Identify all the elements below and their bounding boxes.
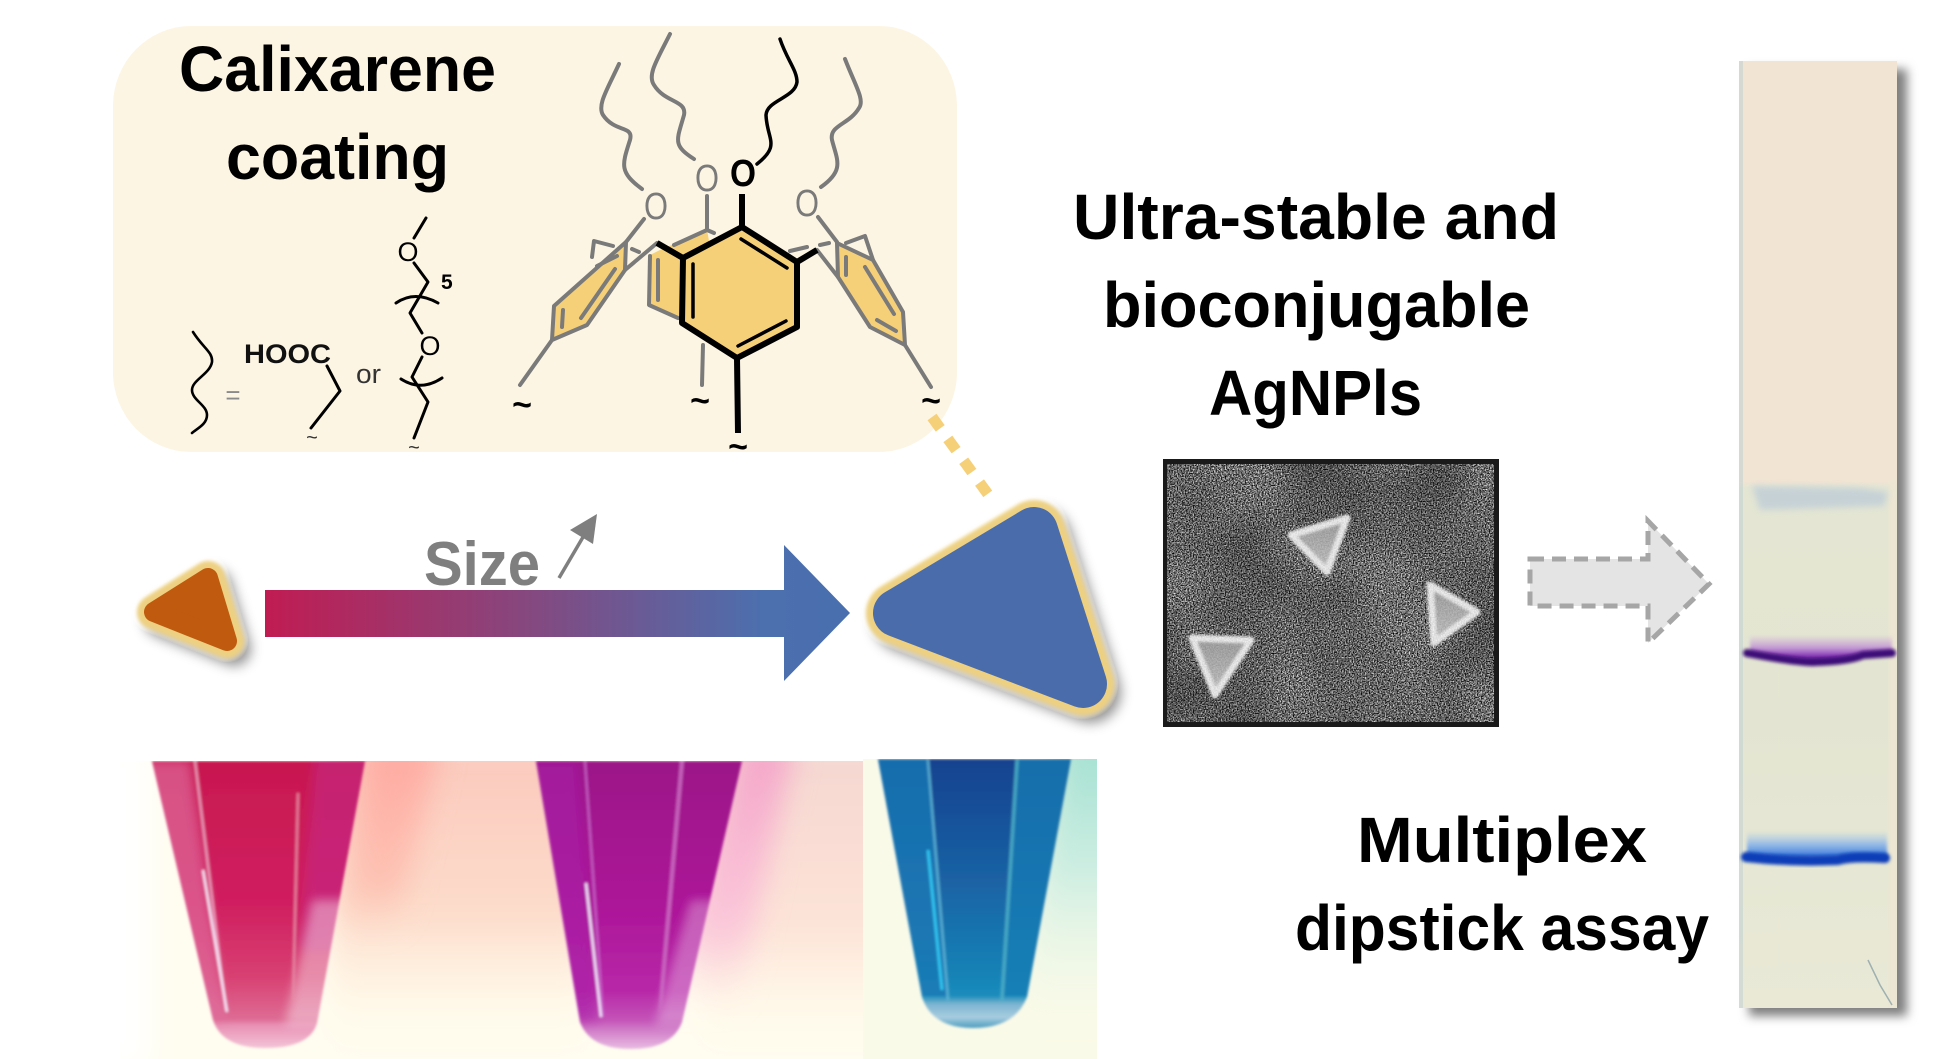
dipstick strip bbox=[1739, 61, 1897, 1008]
right ring: O bbox=[795, 183, 819, 225]
heading: Calixarene coating: Calixarene bbox=[179, 33, 496, 105]
legend: substituent definition: O bbox=[398, 237, 418, 267]
heading: Ultra-stable and bioconjugable AgNPls: bioconjugable bbox=[1103, 269, 1530, 341]
legend: substituent definition: ~ bbox=[408, 437, 420, 459]
chemical structure: calixarene bbox=[512, 34, 941, 466]
heading: Ultra-stable and bioconjugable AgNPls: Ultra-stable and bbox=[1073, 181, 1559, 253]
heading: Ultra-stable and bioconjugable AgNPls: AgNPls bbox=[1209, 357, 1422, 429]
icon: small nanoplate triangle bbox=[154, 578, 227, 641]
heading: Multiplex dipstick assay: Multiplex bbox=[1357, 804, 1647, 876]
photo: blue tube bbox=[863, 759, 1097, 1059]
purple tube bbox=[525, 761, 742, 1049]
legend: substituent definition: or bbox=[356, 359, 381, 389]
arrow: dashed to dipstick bbox=[1530, 521, 1709, 643]
left ring bbox=[512, 64, 668, 424]
arrow: size gradient bbox=[265, 545, 850, 681]
legend: substituent definition bbox=[192, 218, 453, 459]
back ring bbox=[649, 34, 720, 420]
heading: Calixarene coating: coating bbox=[226, 121, 449, 193]
band: blue bbox=[1746, 832, 1887, 861]
right ring: ~ bbox=[921, 382, 941, 420]
photo: red and purple tubes bbox=[148, 761, 863, 1059]
front ring bbox=[657, 39, 817, 466]
label: Size with arrow bbox=[424, 514, 597, 599]
label: Size with arrow: Size bbox=[424, 530, 540, 599]
icon: large nanoplate triangle bbox=[897, 531, 1083, 684]
legend: substituent definition: ~ bbox=[306, 427, 318, 449]
back ring: O bbox=[695, 158, 719, 200]
band: purple bbox=[1747, 636, 1892, 662]
micrograph: AgNPl triangles bbox=[1163, 459, 1499, 727]
left ring: ~ bbox=[512, 386, 532, 424]
dotted connector bbox=[932, 417, 990, 497]
band: top faint blue bbox=[1752, 486, 1888, 510]
panel: calixarene coating bbox=[113, 26, 957, 466]
heading: Calixarene coating bbox=[179, 33, 496, 193]
red tube bbox=[150, 761, 367, 1050]
legend: substituent definition: = bbox=[225, 380, 241, 410]
right ring bbox=[790, 59, 941, 420]
legend: substituent definition: HOOC bbox=[244, 339, 331, 369]
back ring: ~ bbox=[690, 382, 710, 420]
heading: Multiplex dipstick assay: dipstick assay bbox=[1295, 892, 1709, 964]
heading: Multiplex dipstick assay bbox=[1295, 804, 1709, 964]
front ring: O bbox=[730, 153, 756, 195]
front ring: ~ bbox=[728, 428, 748, 466]
legend: substituent definition: O bbox=[420, 331, 440, 361]
left ring: O bbox=[644, 186, 668, 228]
heading: Ultra-stable and bioconjugable AgNPls bbox=[1073, 181, 1559, 429]
legend: substituent definition: 5 bbox=[441, 271, 453, 294]
